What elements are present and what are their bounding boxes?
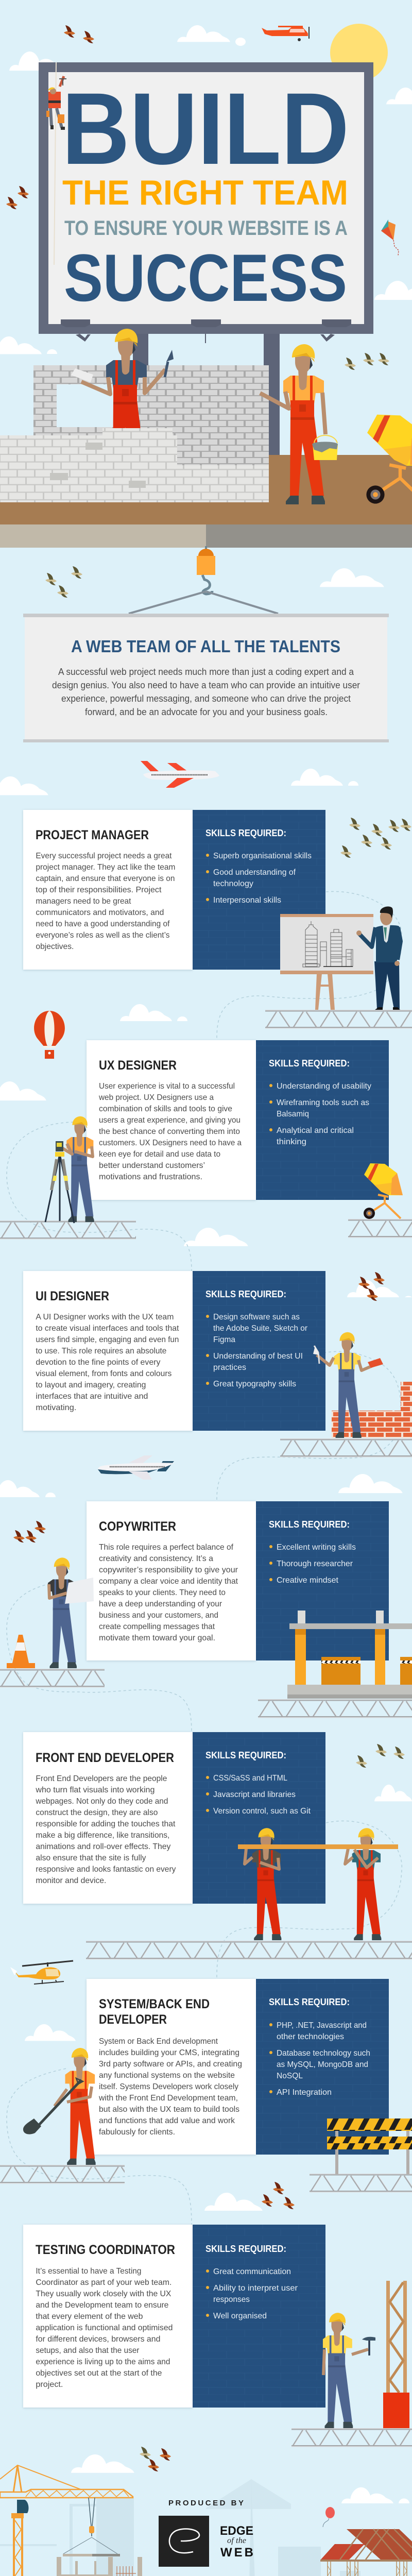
panel: front end developer bbox=[23, 1732, 325, 1904]
panel: ui designer bbox=[23, 1271, 325, 1431]
skills: PHP, .NET, Javascript and bbox=[277, 2021, 367, 2030]
panel: testing coordinator bbox=[23, 2225, 325, 2408]
skills: SKILLS REQUIRED: bbox=[269, 1519, 350, 1530]
card text: top of their responsibilities. Project bbox=[36, 886, 162, 894]
card text: They usually work closely with the UX bbox=[36, 2290, 171, 2298]
skills: Version control, such as Git bbox=[213, 1807, 311, 1816]
skills: thinking bbox=[277, 1138, 306, 1146]
card text: SYSTEM/BACK END bbox=[99, 1997, 210, 2011]
card text: project. bbox=[36, 2380, 63, 2389]
worker with bucket bbox=[260, 344, 338, 504]
card text: DEVELOPER bbox=[99, 2012, 167, 2027]
card text: business and your customers, and bbox=[99, 1611, 218, 1620]
testing coordinator figure bbox=[323, 2313, 375, 2428]
card text: company a clear voice and identity that bbox=[99, 1577, 238, 1586]
card text: webpages. Not only do they code and bbox=[35, 1797, 168, 1806]
red brick wall bbox=[332, 1382, 412, 1438]
card text: everyone’s roles as well as the client’s bbox=[36, 931, 169, 940]
card text bbox=[23, 1271, 193, 1431]
card text: motivate them toward your goal. bbox=[99, 1634, 215, 1642]
concrete beam bbox=[0, 524, 412, 548]
card text: who turn flat visuals into working bbox=[35, 1786, 154, 1794]
card text: COPYWRITER bbox=[99, 1519, 176, 1534]
card text: managers need to be great bbox=[36, 897, 131, 906]
card text: Every successful project needs a great bbox=[36, 852, 172, 860]
formwork columns bbox=[287, 1611, 412, 1699]
card text: experience is living up to the aims and bbox=[36, 2358, 170, 2366]
card text: motivating. bbox=[36, 1403, 76, 1412]
skills: Creative mindset bbox=[277, 1576, 339, 1585]
rear brick wall bbox=[33, 365, 269, 465]
card text: This role requires a perfect balance of bbox=[99, 1543, 234, 1552]
billboard bbox=[39, 62, 373, 465]
card text: Front End Developers are the people bbox=[36, 1774, 167, 1783]
kite bbox=[381, 219, 399, 256]
skills bbox=[193, 1732, 325, 1904]
skills bbox=[193, 1271, 325, 1431]
abseiling window cleaner bbox=[46, 62, 66, 265]
house under construction bbox=[276, 2529, 412, 2576]
card text: users find simple, engaging and even fun bbox=[36, 1335, 179, 1344]
skills: SKILLS REQUIRED: bbox=[205, 2244, 286, 2254]
card text: construct the design, they are also bbox=[36, 1808, 158, 1817]
card text bbox=[87, 1979, 256, 2155]
card text: User experience is vital to a successful bbox=[99, 1082, 235, 1091]
card text: speaks to your clients. They need to bbox=[99, 1588, 226, 1597]
building under construction bbox=[55, 2554, 146, 2576]
skills: Excellent writing skills bbox=[277, 1543, 356, 1552]
skills: responses bbox=[213, 2295, 250, 2304]
card text: keen eye for detail and use data to bbox=[99, 1150, 220, 1159]
card text bbox=[87, 1040, 256, 1200]
card text bbox=[23, 1732, 193, 1904]
skills: Thorough researcher bbox=[277, 1560, 353, 1568]
skills: technology bbox=[213, 879, 253, 888]
card text: responsive and looks fantastic on every bbox=[36, 1865, 176, 1874]
panel: ux designer bbox=[87, 1040, 389, 1200]
skills: API Integration bbox=[277, 2088, 332, 2097]
card text: communicators and motivators, and bbox=[36, 908, 164, 917]
card text: but also with the UX team to build tools bbox=[99, 2105, 239, 2114]
card text: with the Front End Development team, bbox=[98, 2094, 238, 2103]
panel: intro bbox=[23, 614, 389, 742]
billboard post right bbox=[264, 334, 289, 465]
logo: edge of the web: WEB bbox=[220, 2546, 253, 2560]
card text: It’s essential to have a Testing bbox=[36, 2267, 141, 2276]
card text: also ensure that the site is fully bbox=[36, 1854, 146, 1862]
card text: objectives set out at the start of the bbox=[36, 2369, 162, 2378]
tower and base bbox=[383, 2281, 409, 2428]
card text: and the Development team to ensure bbox=[36, 2301, 168, 2310]
title bbox=[62, 72, 349, 315]
intro heading: A WEB TEAM OF ALL THE TALENTS bbox=[71, 637, 340, 656]
card text: interfaces that are intuitive and bbox=[36, 1392, 148, 1401]
skills: Design software such as bbox=[213, 1313, 300, 1321]
card text: better understand customers’ bbox=[99, 1161, 205, 1170]
intro text: experience, powerful messaging, and someone who can drive the project bbox=[61, 693, 351, 704]
cement mixer bbox=[364, 1163, 403, 1219]
copywriter figure bbox=[48, 1557, 94, 1668]
card text: have a deep understanding of your bbox=[99, 1600, 222, 1608]
skills: SKILLS REQUIRED: bbox=[269, 1997, 350, 2007]
card text: System or Back End development bbox=[99, 2037, 218, 2046]
card text: users a great experience, and giving you bbox=[99, 1116, 241, 1125]
title: BUILD bbox=[62, 72, 349, 185]
logo: edge of the web: EDGE bbox=[220, 2524, 253, 2538]
card text: captain, and ensure that everyone is on bbox=[36, 874, 175, 883]
intro text: forward, and be an advocate for you and your business goals. bbox=[85, 707, 328, 717]
skills: Superb organisational skills bbox=[213, 852, 312, 860]
lamps bbox=[61, 319, 351, 343]
worker one bbox=[245, 1828, 281, 1940]
card text: includes building your CMS, integrating bbox=[99, 2048, 239, 2057]
card text: responsible for adding the touches that bbox=[36, 1820, 176, 1828]
skills: Analytical and critical bbox=[277, 1126, 354, 1135]
skills: Understanding of usability bbox=[277, 1082, 371, 1091]
card text: that every element of the web bbox=[36, 2312, 143, 2321]
billboard panel bbox=[48, 72, 364, 324]
skills: Figma bbox=[213, 1335, 235, 1344]
logo: edge of the web bbox=[159, 2516, 253, 2567]
helicopter bbox=[10, 1961, 73, 1984]
skills: SKILLS REQUIRED: bbox=[205, 828, 286, 838]
card text: 3rd party software or APIs, and creating bbox=[99, 2060, 242, 2069]
skills: Javascript and libraries bbox=[213, 1790, 296, 1799]
card text: for different devices, browsers and bbox=[36, 2335, 160, 2344]
card text: TESTING COORDINATOR bbox=[36, 2243, 175, 2257]
red balloon bbox=[323, 2507, 335, 2527]
easel with drawing bbox=[280, 914, 373, 1010]
traffic cone bbox=[7, 1635, 35, 1668]
skills: Great communication bbox=[213, 2267, 291, 2276]
card text: to use. This role requires an absolute bbox=[36, 1347, 166, 1355]
cement mixer bbox=[366, 415, 412, 504]
card text: make a big difference, like transitions, bbox=[36, 1831, 169, 1840]
panel: copywriter bbox=[87, 1501, 389, 1660]
intro text bbox=[52, 667, 360, 717]
skills: other technologies bbox=[277, 2032, 344, 2041]
skills: Interpersonal skills bbox=[213, 896, 281, 905]
produced by: PRODUCED BY bbox=[168, 2499, 244, 2507]
dashed route bbox=[7, 891, 402, 2225]
card text: Coordinator as part of your web team. bbox=[36, 2278, 171, 2287]
card text: to layout and imagery, creating bbox=[36, 1381, 146, 1389]
card text: need to have a good understanding of bbox=[36, 920, 170, 928]
card text: project manager. They act like the team bbox=[36, 863, 175, 872]
front brick wall bbox=[0, 428, 269, 502]
billboard post left bbox=[133, 334, 148, 370]
skills: SKILLS REQUIRED: bbox=[205, 1750, 286, 1760]
skills bbox=[193, 2225, 325, 2408]
card text: PROJECT MANAGER bbox=[36, 828, 149, 842]
card text: A UI Designer works with the UX team bbox=[36, 1313, 174, 1321]
plank bbox=[238, 1844, 398, 1849]
skills: CSS/SaSS and HTML bbox=[213, 1774, 287, 1783]
card text: web project. UX Designers use a bbox=[98, 1093, 214, 1102]
skills: practices bbox=[213, 1363, 246, 1372]
card text: UX DESIGNER bbox=[99, 1058, 177, 1073]
skills bbox=[256, 1979, 389, 2155]
card text: to create visual interfaces and tools that bbox=[36, 1324, 179, 1333]
intro text: A successful web project needs much more than just a coding expert and a bbox=[58, 667, 354, 677]
card text: devotion to the fine points of every bbox=[36, 1358, 160, 1367]
skills bbox=[256, 1040, 389, 1200]
card text: creativity and consistency. It’s a bbox=[99, 1554, 213, 1563]
logo: edge of the web: of the bbox=[227, 2536, 246, 2545]
panel: system back end developer bbox=[87, 1979, 389, 2155]
crane hook bbox=[129, 546, 278, 614]
skills bbox=[256, 1501, 389, 1660]
card text: UI DESIGNER bbox=[36, 1289, 109, 1303]
skills: Balsamiq bbox=[277, 1110, 309, 1118]
hero ground bbox=[0, 455, 412, 524]
card text: fabulously for clients. bbox=[99, 2128, 175, 2137]
title: TO ENSURE YOUR WEBSITE IS A bbox=[64, 217, 348, 240]
card text: copywriter’s responsibility to give your bbox=[99, 1566, 238, 1574]
road barrier bbox=[327, 2119, 412, 2174]
card text bbox=[23, 2225, 193, 2408]
card text: create compelling messages that bbox=[99, 1622, 215, 1631]
card text: visual element, from fonts and colours bbox=[36, 1369, 171, 1378]
card text: monitor and device. bbox=[36, 1876, 106, 1885]
bricklayer UI figure bbox=[313, 1332, 383, 1438]
skills: Well organised bbox=[213, 2312, 267, 2320]
card text: application is functional and optimised bbox=[36, 2324, 173, 2332]
crane bbox=[0, 2465, 133, 2576]
card text: objectives. bbox=[36, 942, 74, 951]
card text: motivations and frustrations. bbox=[99, 1173, 202, 1181]
skills: as MySQL, MongoDB and bbox=[277, 2060, 368, 2069]
bricklayer worker bbox=[71, 329, 174, 428]
panel: project manager bbox=[23, 810, 325, 970]
card text bbox=[87, 1501, 256, 1660]
title: THE RIGHT TEAM bbox=[62, 173, 348, 212]
card text: animations and roll-over effects. They bbox=[36, 1842, 170, 1851]
skills: Ability to interpret user bbox=[213, 2284, 298, 2293]
skills: SKILLS REQUIRED: bbox=[205, 1289, 286, 1299]
shoveling worker bbox=[23, 2048, 96, 2165]
skills: Good understanding of bbox=[213, 868, 296, 877]
title: SUCCESS bbox=[64, 240, 347, 315]
skills: Great typography skills bbox=[213, 1380, 296, 1388]
card text: and functions that add value and work bbox=[99, 2116, 235, 2125]
billboard frame bbox=[39, 62, 373, 334]
orange light plane bbox=[262, 26, 309, 41]
skills: Database technology such bbox=[277, 2049, 370, 2058]
skills: Understanding of best UI bbox=[213, 1352, 303, 1361]
card text: combination of skills and tools to give bbox=[99, 1105, 232, 1113]
skills: Wireframing tools such as bbox=[277, 1098, 369, 1107]
icon: airliner red bbox=[141, 761, 219, 788]
footer skyline haze bbox=[0, 2479, 360, 2576]
sun bbox=[330, 24, 388, 81]
skills bbox=[193, 810, 325, 970]
project manager figure bbox=[356, 907, 401, 1010]
hot air balloon bbox=[33, 1011, 65, 1059]
skills: NoSQL bbox=[277, 2072, 303, 2080]
card text: setups, and also that the user bbox=[36, 2346, 140, 2355]
card text: FRONT END DEVELOPER bbox=[36, 1751, 174, 1765]
card text: the best chance of converting them into bbox=[99, 1127, 240, 1136]
card text: any functional systems on the website bbox=[99, 2071, 235, 2080]
card text bbox=[23, 810, 193, 970]
intro text: design genius. You also need to have a team who can provide an intuitive user bbox=[52, 680, 360, 690]
worker two bbox=[345, 1828, 381, 1940]
skills: SKILLS REQUIRED: bbox=[269, 1058, 350, 1069]
trusses bbox=[0, 1010, 412, 2447]
icon: airliner blue bbox=[98, 1455, 174, 1480]
surveyor with theodolite bbox=[45, 1116, 94, 1223]
skills: the Adobe Suite, Sketch or bbox=[213, 1324, 308, 1333]
card text: itself. Systems Developers work closely bbox=[99, 2082, 238, 2091]
front end workers carrying plank bbox=[238, 1828, 398, 1940]
card text: customers. UX Designers need to have a bbox=[99, 1139, 242, 1147]
